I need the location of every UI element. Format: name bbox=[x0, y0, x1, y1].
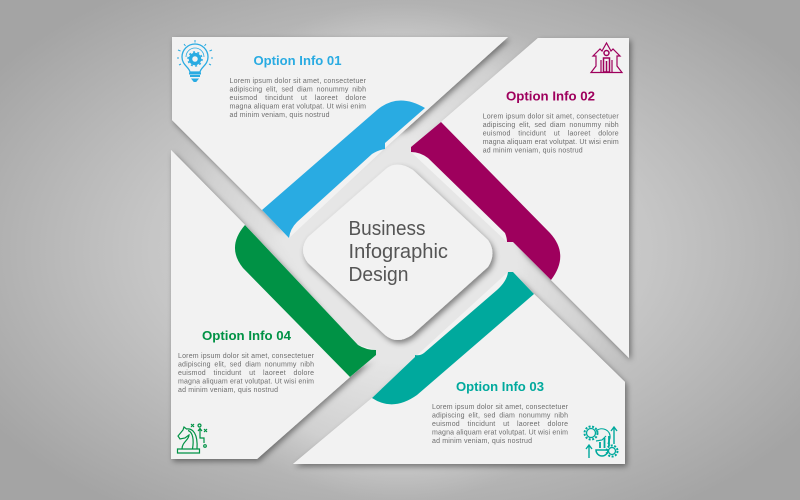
icon: arrows and person bbox=[591, 43, 622, 72]
heading: option info 03: Option Info 03 bbox=[456, 379, 544, 394]
text block: option 01 body: adipiscing elit, sed diam nonummy nibh bbox=[230, 86, 366, 94]
text block: option 04 body: Lorem ipsum dolor sit amet, consectetuer bbox=[178, 353, 315, 360]
text block: option 01 body: Lorem ipsum dolor sit amet, consectetuer bbox=[230, 78, 367, 85]
band: magenta bbox=[411, 122, 560, 280]
text block: option 02 body: euismod tincidunt ut laoreet dolore bbox=[483, 130, 619, 138]
icon: gears and growth arrows bbox=[584, 426, 618, 458]
panel: option 01 bbox=[172, 37, 508, 238]
text block: option 02 body: ad minim veniam, quis nostrud bbox=[483, 148, 583, 154]
text block: option 01 body: euismod tincidunt ut laoreet dolore bbox=[230, 95, 366, 102]
icon: chess knight strategy bbox=[178, 424, 207, 453]
heading: option info 01: Option Info 01 bbox=[254, 53, 342, 68]
center title: Infographic bbox=[348, 241, 448, 263]
text block: option 01 body: ad minim veniam, quis nostrud bbox=[230, 112, 330, 119]
heading: option info 02: Option Info 02 bbox=[506, 88, 595, 104]
text block: option 03 body: magna aliquam erat volutpat. Ut wisi enim bbox=[432, 430, 568, 436]
panel: option 04 bbox=[171, 150, 376, 459]
icon: light bulb with gear bbox=[177, 40, 213, 82]
text block: option 04 body: ad minim veniam, quis nostrud bbox=[178, 387, 278, 394]
text block: option 01 body bbox=[230, 78, 367, 119]
central gray field bbox=[150, 2, 650, 500]
text block: option 03 body: euismod tincidunt ut laoreet dolore bbox=[432, 421, 568, 428]
panel shadows bbox=[171, 37, 629, 464]
text block: option 01 body: magna aliquam erat volutpat. Ut wisi enim bbox=[230, 104, 366, 110]
text block: option 03 body: adipiscing elit, sed diam nonummy nibh bbox=[432, 412, 568, 420]
text block: option 02 body: adipiscing elit, sed diam nonummy nibh bbox=[483, 122, 619, 129]
band: teal bbox=[372, 272, 534, 404]
center title: Design bbox=[348, 264, 408, 286]
text block: option 03 body bbox=[432, 404, 569, 445]
heading: option info 04: Option Info 04 bbox=[202, 328, 292, 343]
text block: option 02 body bbox=[483, 114, 619, 154]
text block: option 04 body: adipiscing elit, sed diam nonummy nibh bbox=[178, 362, 314, 368]
light ring around the center bbox=[276, 132, 522, 368]
text block: option 02 body: magna aliquam erat volutpat. Ut wisi enim bbox=[483, 139, 619, 146]
text block: option 03 body: Lorem ipsum dolor sit amet, consectetuer bbox=[432, 404, 569, 411]
text block: option 04 body: euismod tincidunt ut laoreet dolore bbox=[178, 370, 314, 377]
band: green bbox=[235, 225, 376, 377]
panel: option 03 bbox=[293, 272, 625, 464]
text block: option 03 body: ad minim veniam, quis nostrud bbox=[432, 438, 532, 445]
text block: option 04 body: magna aliquam erat volutpat. Ut wisi enim bbox=[178, 378, 314, 386]
center title bbox=[348, 218, 448, 286]
text block: option 04 body bbox=[178, 353, 315, 394]
band: blue bbox=[262, 100, 425, 238]
panel: option 02 bbox=[411, 38, 629, 358]
center title: Business bbox=[348, 218, 426, 240]
center diamond bbox=[303, 164, 492, 340]
text block: option 02 body: Lorem ipsum dolor sit amet, consectetuer bbox=[483, 114, 619, 120]
